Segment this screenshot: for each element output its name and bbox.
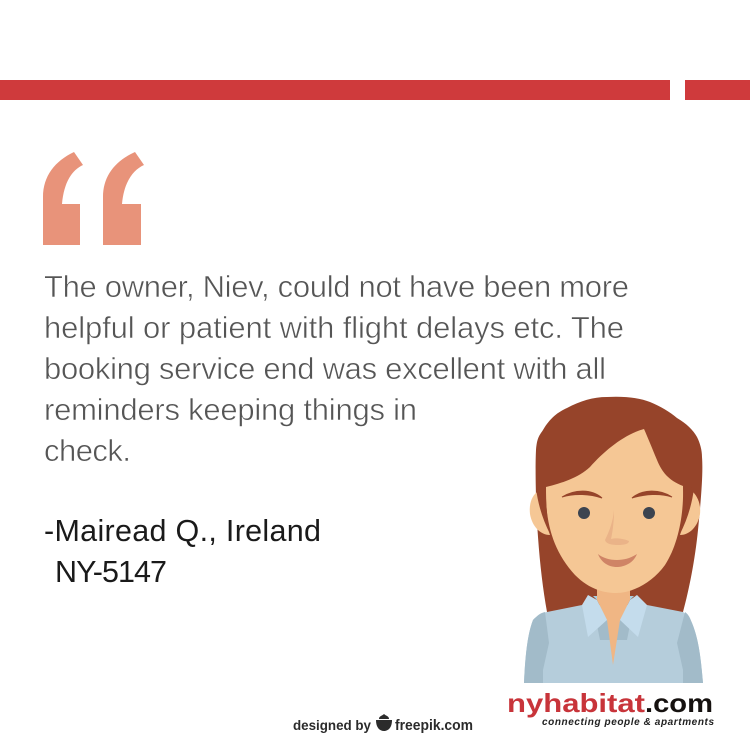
hair — [536, 397, 702, 612]
freepik credit: designed by — [293, 717, 371, 733]
shirt — [524, 605, 703, 683]
eyes — [578, 507, 655, 519]
collar — [582, 595, 647, 637]
face — [546, 429, 683, 593]
neck — [597, 585, 630, 665]
attribution: -Mairead Q., Ireland — [44, 514, 321, 548]
nyhabitat logo: .com — [645, 688, 713, 718]
freepik credit — [293, 714, 473, 734]
quote text: booking service end was excellent with all — [44, 351, 606, 386]
illustration: woman — [524, 397, 703, 683]
attribution: NY-5147 — [55, 555, 167, 589]
freepik credit: freepik.com — [395, 717, 473, 734]
attribution — [44, 514, 321, 589]
nyhabitat logo: nyhabitat — [507, 688, 645, 718]
icon: quotation marks — [43, 152, 144, 245]
icon: freepik mascot — [376, 714, 392, 731]
hair strands at temples — [536, 486, 694, 534]
quote text: The owner, Niev, could not have been more — [44, 269, 629, 304]
collar shadow — [597, 620, 630, 655]
quote text — [44, 269, 629, 468]
nyhabitat logo: connecting people & apartments — [542, 717, 714, 728]
nose — [605, 510, 629, 545]
quote text: helpful or patient with flight delays etc. The — [44, 310, 624, 345]
ears — [530, 492, 700, 535]
nyhabitat logo — [507, 688, 714, 728]
quote text: check. — [44, 433, 131, 468]
quote text: reminders keeping things in — [44, 392, 417, 427]
eyebrows — [562, 491, 672, 498]
top red bar — [0, 80, 750, 100]
shirt shadows — [524, 612, 703, 683]
smile — [598, 554, 637, 567]
